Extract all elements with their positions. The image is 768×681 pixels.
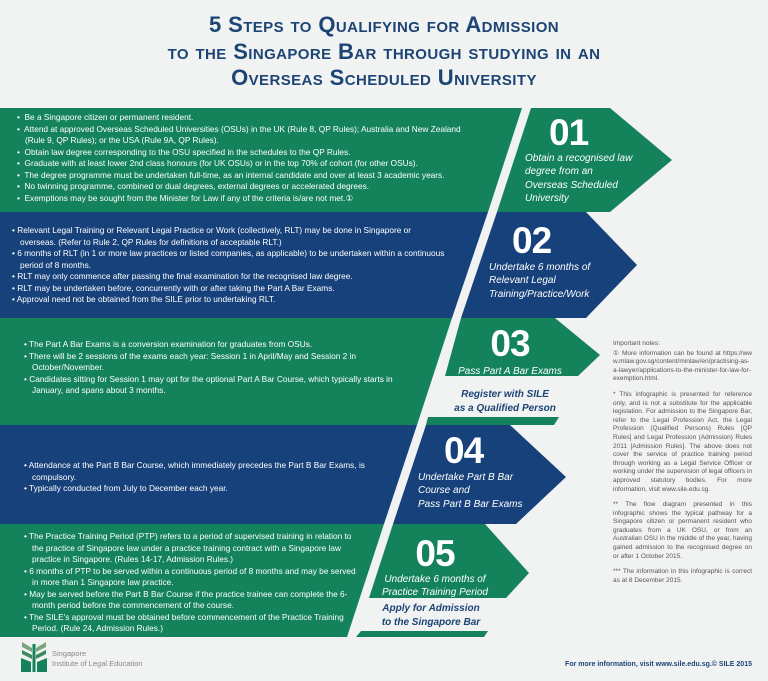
step 05 label (382, 533, 488, 598)
important notes: *** The information in this infographic is correct as at 8 December 2015. (613, 568, 752, 584)
text: step 3 details: • There will be 2 sessions of the exams each year: Session 1 in April/May and Session 2 in October/November. (24, 350, 356, 372)
step 05 sub: apply: Apply for Admission (382, 603, 480, 614)
important notes: * This infographic is presented for reference only, and is not a substitute for the applicable legislation. For admission to the Singapore Bar, refer to the Legal Profession Act, the Legal Profession (Qualified Persons) Rules [QP Rules] and Legal Profession (Admission) Rules 2011 [Admission Rules]. The above does not cover the service of practice training period through working as a Legal Service Officer or working under the supervision of legal officers in approved statutory bodies. For more information, visit www.sile.edu.sg. (613, 391, 752, 492)
logo text (52, 649, 142, 668)
text: step 2 details: • RLT may only commence after passing the final examination for the recognised law degree. (12, 271, 353, 281)
arrow 02 (461, 212, 637, 318)
step 03 sub: register: as a Qualified Person (454, 402, 556, 414)
text: step 2 details: • 6 months of RLT (in 1 or more law practices or listed companies, as applicable) to be undertaken within a continuous period of 8 months. (12, 248, 444, 270)
icon: leaf logo (21, 642, 47, 672)
text: step 2 details: • Approval need not be obtained from the SILE prior to undertaking RLT. (12, 294, 275, 304)
important notes: ** The flow diagram presented in this infographic shows the typical pathway for a Singapore citizen or permanent resident who graduates from a UK OSU, or from an Australian OSU in the middle of the year, having gained admission to the recognised degree on or after 1 October 2015. (613, 501, 752, 560)
step 04 label (418, 430, 522, 510)
text: step 1 criteria: • Be a Singapore citizen or permanent resident. (17, 112, 193, 122)
text: step 5 details: • May be served before the Part B Bar Course if the practice trainee can complete the 6-month period before the commencement of the course. (24, 588, 347, 610)
text: step 1 criteria: • Graduate with at least lower 2nd class honours (for UK OSUs) or in the top 70% of cohort (for other OSUs). (17, 158, 418, 168)
step 04 label: 04 (444, 430, 483, 471)
text: step 3 details: • Candidates sitting for Session 1 may opt for the optional Part A Bar Course, which typically starts in January, and spans about 3 months. (24, 374, 393, 395)
step 02 label: 02 (512, 220, 551, 261)
step 01 label: Obtain a recognised law degree from an Overseas Scheduled University (525, 153, 632, 204)
text: step 5 details: • 6 months of PTP to be served within a continuous period of 8 months and may be served in more than 1 Singapore law practice. (24, 566, 356, 587)
band 3 left panel (0, 318, 452, 425)
logo text: Institute of Legal Education (52, 659, 142, 668)
logo text: Singapore (52, 649, 86, 658)
text: step 1 criteria: • The degree programme must be undertaken full-time, as an internal candidate and over at least 3 academic years. (17, 170, 445, 180)
text: step 3 details (24, 339, 393, 395)
text: step 1 criteria: • Attend at approved Overseas Scheduled Universities (OSUs) in the UK (Rule 8, QP Rules); Australia and New Zealand (Rule 9, QP Rules); or the USA (Rule 9A, QP Rules). (17, 124, 461, 145)
band 5 left panel (0, 524, 384, 637)
text: step 5 details: • The SILE's approval must be obtained before commencement of the Practice Training Period. (Rule 24, Admission Rules.) (24, 612, 344, 633)
band 1 left panel (0, 108, 522, 212)
important notes (613, 340, 752, 584)
text: step 4 details: • Typically conducted from July to December each year. (24, 483, 228, 493)
step 03 label: Pass Part A Bar Exams (458, 366, 562, 377)
arrow 03 (445, 318, 600, 376)
title (168, 12, 600, 90)
text: step 2 details: • RLT may be undertaken before, concurrently with or after taking the Part A Bar Exams. (12, 282, 335, 292)
arrow 01 (497, 108, 672, 212)
text: step 1 criteria: • Exemptions may be sought from the Minister for Law if any of the criteria is/are not met.① (17, 192, 353, 202)
step 05 sub: apply (382, 603, 481, 628)
title: Overseas Scheduled University (231, 65, 537, 90)
important notes: Important notes: (613, 340, 660, 347)
step 03 sub: register (454, 389, 556, 414)
step 04 label: Undertake Part B Bar Course and (418, 472, 513, 496)
band 2 left panel (0, 212, 488, 318)
arrow 05 (369, 524, 529, 598)
important notes: ① More information can be found at https://www.mlaw.gov.sg/content/minlaw/en/practising-as-a-lawyer/applications-to-the-minister-for-law-for-exemption.html. (613, 350, 752, 382)
step 04 label: Pass Part B Bar Exams (418, 499, 522, 510)
step 02 label: Undertake 6 months of Relevant Legal Training/Practice/Work (489, 262, 590, 300)
step 03 sub: register: Register with SILE (461, 389, 549, 400)
step 01 label (525, 112, 633, 204)
footer credit: For more information, visit www.sile.edu.sg.© SILE 2015 (565, 661, 752, 668)
text: step 2 details (12, 225, 444, 304)
arrow 04 (393, 425, 566, 524)
text: step 1 criteria (17, 112, 461, 202)
strip 05 (356, 631, 488, 637)
step 05 label: Undertake 6 months of Practice Training Period (382, 574, 488, 598)
band 4 left panel (0, 425, 417, 524)
text: step 4 details (24, 460, 365, 493)
text: step 3 details: • The Part A Bar Exams is a conversion examination for graduates from OSUs. (24, 339, 312, 349)
text: step 5 details: • The Practice Training Period (PTP) refers to a period of supervised training in relation to the practice of Singapore law under a practice training contract with a Singapore law practice in Singapore. (Rules 14-17, Admission Rules.) (24, 531, 351, 564)
step 03 label (458, 323, 562, 377)
step 05 label: 05 (415, 533, 455, 574)
text: step 1 criteria: • No twinning programme, combined or dual degrees, external degrees or accelerated degrees. (17, 181, 369, 191)
text: step 2 details: • Relevant Legal Training or Relevant Legal Practice or Work (collectively, RLT) may be done in Singapore or overseas. (Refer to Rule 2, QP Rules for definitions of acceptable RLT.) (12, 225, 411, 246)
logo (21, 642, 142, 672)
title: to the Singapore Bar through studying in an (168, 38, 600, 64)
step 03 label: 03 (490, 323, 530, 364)
title: 5 Steps to Qualifying for Admission (209, 12, 559, 37)
step 02 label (489, 220, 591, 300)
text: step 1 criteria: • Obtain law degree corresponding to the OSU specified in the schedules to the QP Rules. (17, 146, 350, 156)
step 01 label: 01 (549, 112, 588, 153)
step 05 sub: apply: to the Singapore Bar (382, 616, 480, 628)
text: step 4 details: • Attendance at the Part B Bar Course, which immediately precedes the Part B Bar Exams, is compulsory. (24, 460, 365, 482)
strip 03 (426, 417, 559, 425)
text: step 5 details (24, 531, 356, 633)
